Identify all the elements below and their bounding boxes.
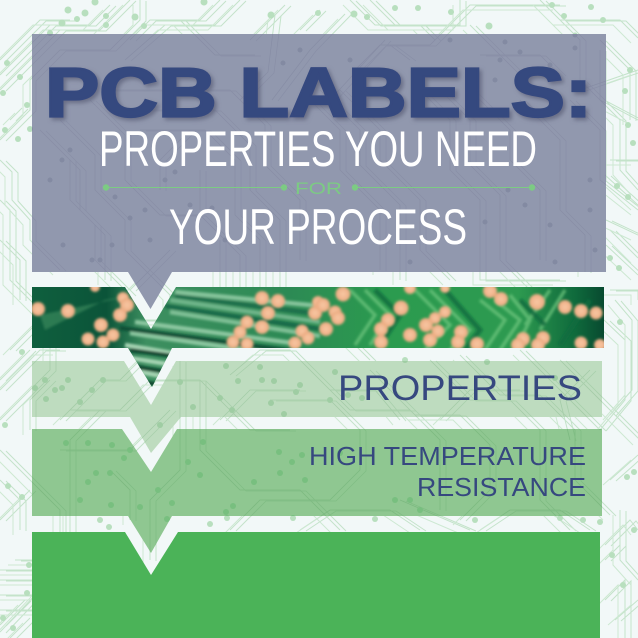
label: properties: PROPERTIES [338, 369, 582, 408]
photo strip: circuit board [31, 282, 606, 388]
label: high temperature resistance: RESISTANCE [417, 472, 586, 502]
subheading: your process: YOUR PROCESS [169, 199, 467, 255]
heading: PCB LABELS: PCB LABELS: [45, 54, 592, 132]
divider with FOR label: FOR [295, 179, 342, 198]
panel: solid green band [32, 532, 600, 638]
divider with FOR label [103, 179, 535, 198]
label: high temperature resistance: HIGH TEMPERATURE [309, 441, 586, 471]
panel: title speech box [32, 34, 606, 309]
panel: high temperature band [32, 429, 602, 553]
label: high temperature resistance [309, 441, 586, 502]
panel: properties band [32, 361, 602, 453]
